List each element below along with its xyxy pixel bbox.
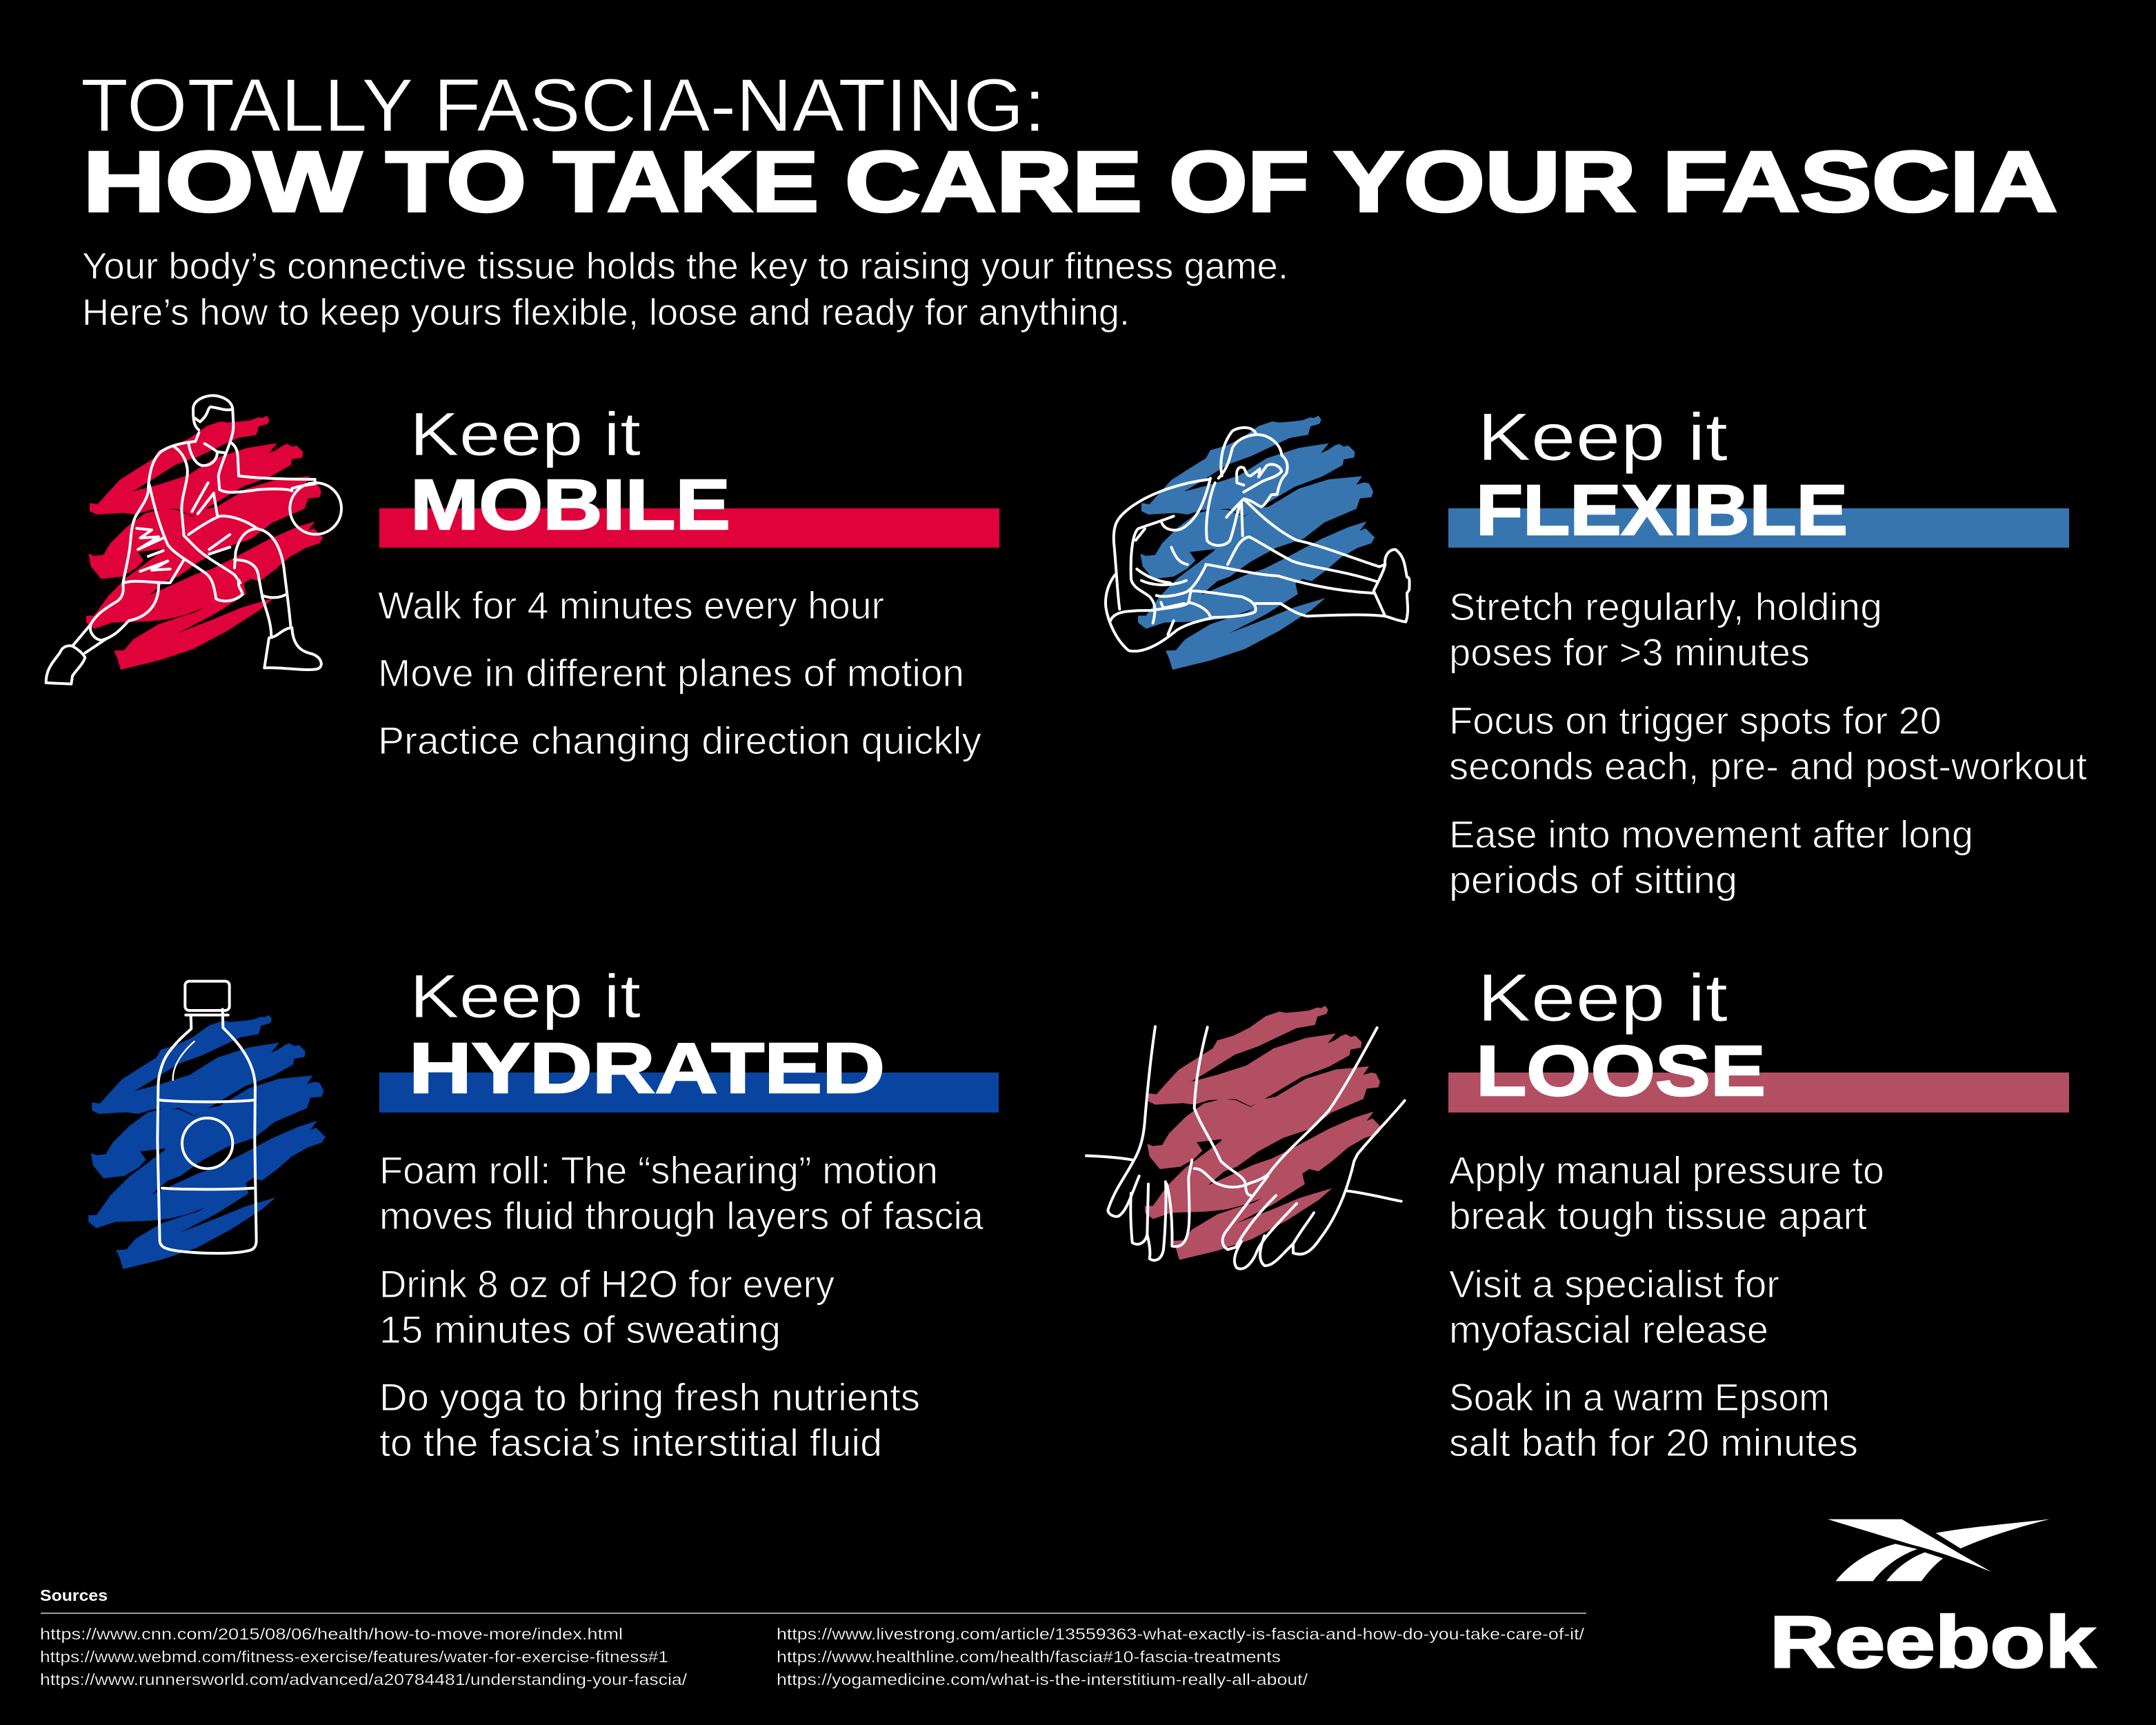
heading: keep it flexible: FLEXIBLE <box>1476 470 1848 550</box>
sources: https://www.healthline.com/health/fascia#10-fascia-treatments <box>777 1648 1281 1666</box>
heading: keep it mobile <box>379 399 999 548</box>
tips: hydrated: Drink 8 oz of H2O for every <box>379 1262 835 1306</box>
title: CARE <box>845 134 1142 230</box>
icon: seated stretch <box>1106 416 1410 670</box>
sources: Sources <box>40 1586 108 1604</box>
heading: keep it mobile: MOBILE <box>410 465 730 544</box>
tips: mobile: Practice changing direction quickly <box>378 719 981 762</box>
heading: keep it mobile: Keep it <box>410 399 641 468</box>
heading: keep it hydrated: Keep it <box>410 961 641 1030</box>
heading: keep it hydrated: HYDRATED <box>409 1028 885 1108</box>
sources <box>40 1586 1586 1688</box>
icon: water bottle <box>88 981 326 1269</box>
tips: mobile: Move in different planes of motion <box>378 651 964 695</box>
tips: flexible: Stretch regularly, holding <box>1449 585 1882 628</box>
title: HOW <box>83 134 361 230</box>
tips: flexible: seconds each, pre- and post-workout <box>1449 744 2087 788</box>
icon: massaging hands <box>1086 1006 1405 1269</box>
tips: flexible: poses for >3 minutes <box>1449 630 1810 674</box>
tips: loose: salt bath for 20 minutes <box>1449 1421 1858 1464</box>
title: TOTALLY FASCIA-NATING: <box>81 63 1046 148</box>
intro text <box>82 246 1288 333</box>
tips: hydrated <box>379 1148 984 1464</box>
panel: keep it loose <box>1086 960 2069 1464</box>
heading: keep it loose: Keep it <box>1477 960 1728 1035</box>
tips: hydrated: to the fascia’s interstitial fluid <box>379 1421 882 1464</box>
tips: hydrated: 15 minutes of sweating <box>379 1308 781 1351</box>
tips: hydrated: Do yoga to bring fresh nutrients <box>379 1375 920 1419</box>
title: YOUR <box>1334 134 1636 230</box>
tips: flexible: Focus on trigger spots for 20 <box>1449 699 1942 742</box>
tips: mobile <box>378 584 981 762</box>
panel: keep it flexible <box>1106 399 2087 901</box>
title: TO <box>386 134 526 230</box>
logo: Reebok: Reebok <box>1770 1602 2096 1683</box>
tips: flexible: periods of sitting <box>1449 858 1737 901</box>
title: OF <box>1169 134 1309 230</box>
tips: flexible: Ease into movement after long <box>1449 812 1973 856</box>
tips: loose: Soak in a warm Epsom <box>1449 1375 1830 1419</box>
heading: keep it flexible <box>1448 399 2069 550</box>
tips: flexible <box>1449 585 2087 901</box>
tips: loose: Apply manual pressure to <box>1449 1148 1884 1192</box>
icon: basketball player <box>46 395 341 684</box>
sources: https://www.webmd.com/fitness-exercise/features/water-for-exercise-fitness#1 <box>40 1648 668 1666</box>
panel: keep it mobile <box>46 395 999 762</box>
title: TAKE <box>553 134 819 230</box>
tips: loose <box>1449 1148 1884 1464</box>
heading: keep it flexible: Keep it <box>1477 399 1728 475</box>
heading: keep it hydrated <box>379 961 999 1113</box>
tips: loose: break tough tissue apart <box>1449 1194 1867 1237</box>
sources: https://www.runnersworld.com/advanced/a20784481/understanding-your-fascia/ <box>40 1671 688 1688</box>
heading: keep it loose: LOOSE <box>1476 1031 1766 1110</box>
panel: keep it hydrated <box>88 961 999 1464</box>
tips: hydrated: moves fluid through layers of fascia <box>379 1194 984 1237</box>
tips: hydrated: Foam roll: The “shearing” motion <box>379 1148 938 1192</box>
title: FASCIA <box>1662 134 2057 230</box>
tips: mobile: Walk for 4 minutes every hour <box>378 584 884 627</box>
sources: https://yogamedicine.com/what-is-the-interstitium-really-all-about/ <box>777 1671 1308 1688</box>
sources: https://www.cnn.com/2015/08/06/health/how-to-move-more/index.html <box>40 1625 623 1643</box>
tips: loose: Visit a specialist for <box>1449 1262 1779 1306</box>
logo: Reebok <box>1770 1519 2096 1683</box>
tips: loose: myofascial release <box>1449 1308 1768 1351</box>
title <box>81 63 2057 230</box>
heading: keep it loose <box>1448 960 2069 1113</box>
intro text: Your body’s connective tissue holds the key to raising your fitness game. <box>82 246 1288 287</box>
sources: https://www.livestrong.com/article/13559363-what-exactly-is-fascia-and-how-do-you-take-care-of-it/ <box>777 1625 1585 1643</box>
intro text: Here’s how to keep yours flexible, loose and ready for anything. <box>82 292 1130 333</box>
